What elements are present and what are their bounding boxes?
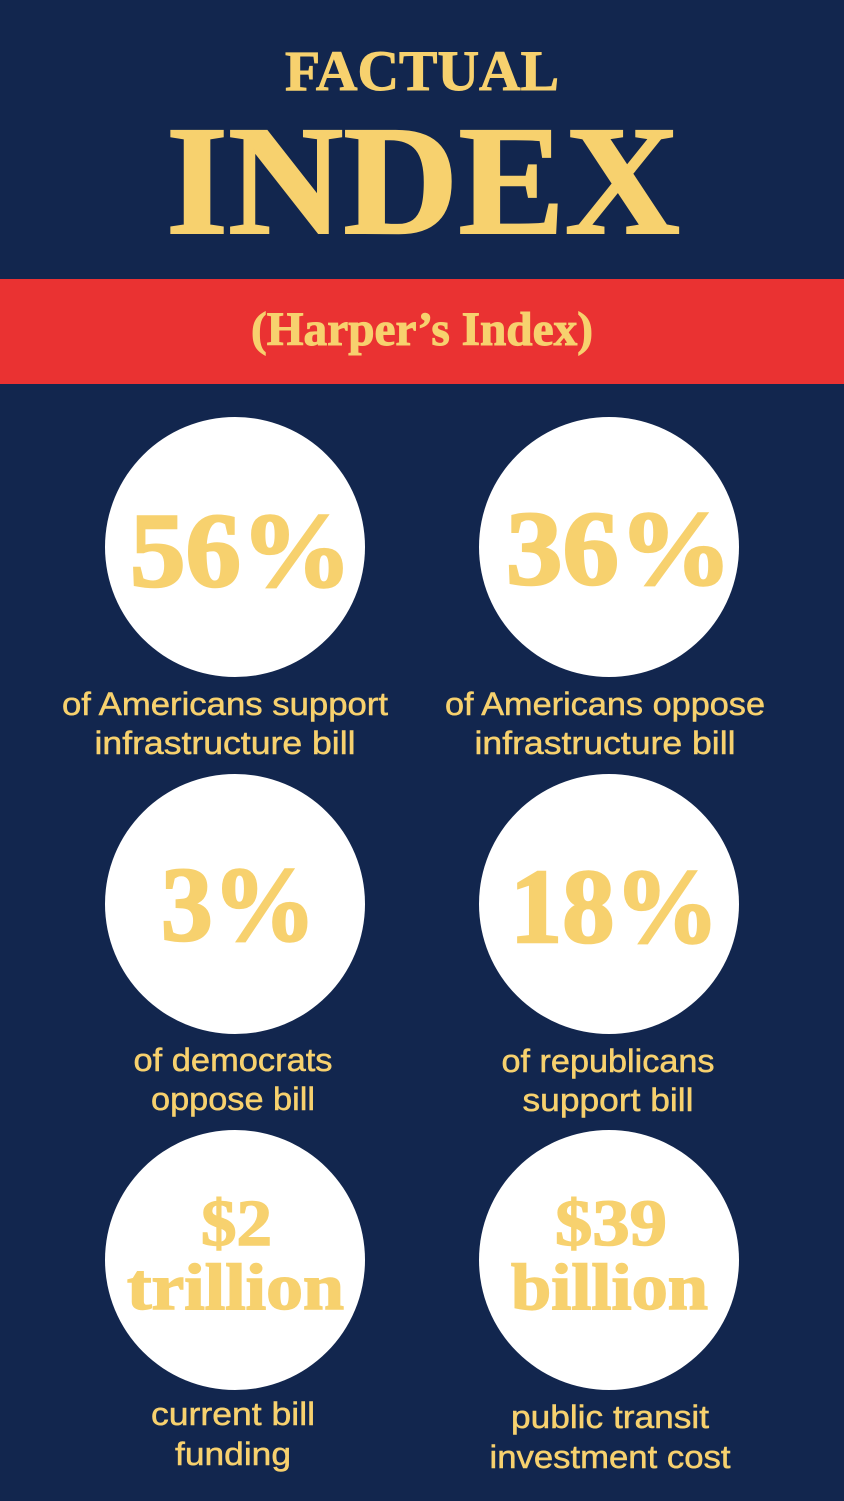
panel: $39 billion stat [479, 1130, 739, 1475]
title: Factual Index: INDEX [166, 94, 680, 267]
panel: 36% stat: 36% [506, 490, 732, 607]
panel: 18% stat: support bill [522, 1082, 694, 1118]
panel: $39 billion stat: billion [511, 1251, 708, 1324]
panel: 18% stat [479, 774, 739, 1118]
panel: $39 billion stat: investment cost [490, 1439, 731, 1475]
panel: 18% stat: of republicans [502, 1043, 714, 1079]
panel: 56% stat: 56% [130, 492, 352, 609]
panel: $2 trillion stat: $2 [201, 1187, 272, 1260]
panel: $2 trillion stat: current bill [151, 1396, 315, 1432]
panel: 56% stat: of Americans support [62, 686, 388, 722]
panel: 3% stat [105, 774, 365, 1117]
panel: 36% stat: infrastructure bill [474, 725, 736, 761]
panel: 56% stat: infrastructure bill [94, 725, 356, 761]
panel: 3% stat: 3% [161, 846, 316, 963]
panel: $2 trillion stat: funding [175, 1436, 291, 1472]
banner: Harper's Index [0, 279, 844, 384]
panel: 56% stat [62, 417, 388, 761]
panel: $2 trillion stat: trillion [127, 1251, 344, 1324]
panel: 18% stat: 18% [510, 848, 719, 965]
panel: $39 billion stat: $39 [555, 1187, 667, 1260]
banner: Harper's Index: (Harper’s Index) [251, 303, 593, 356]
panel: 3% stat: of democrats [134, 1042, 332, 1078]
panel: 36% stat: of Americans oppose [445, 686, 765, 722]
panel: 3% stat: oppose bill [151, 1081, 315, 1117]
title: Factual Index: FACTUAL [285, 40, 559, 103]
panel: 36% stat [445, 417, 765, 761]
panel: $39 billion stat: public transit [511, 1399, 709, 1435]
panel: $2 trillion stat [105, 1130, 365, 1472]
